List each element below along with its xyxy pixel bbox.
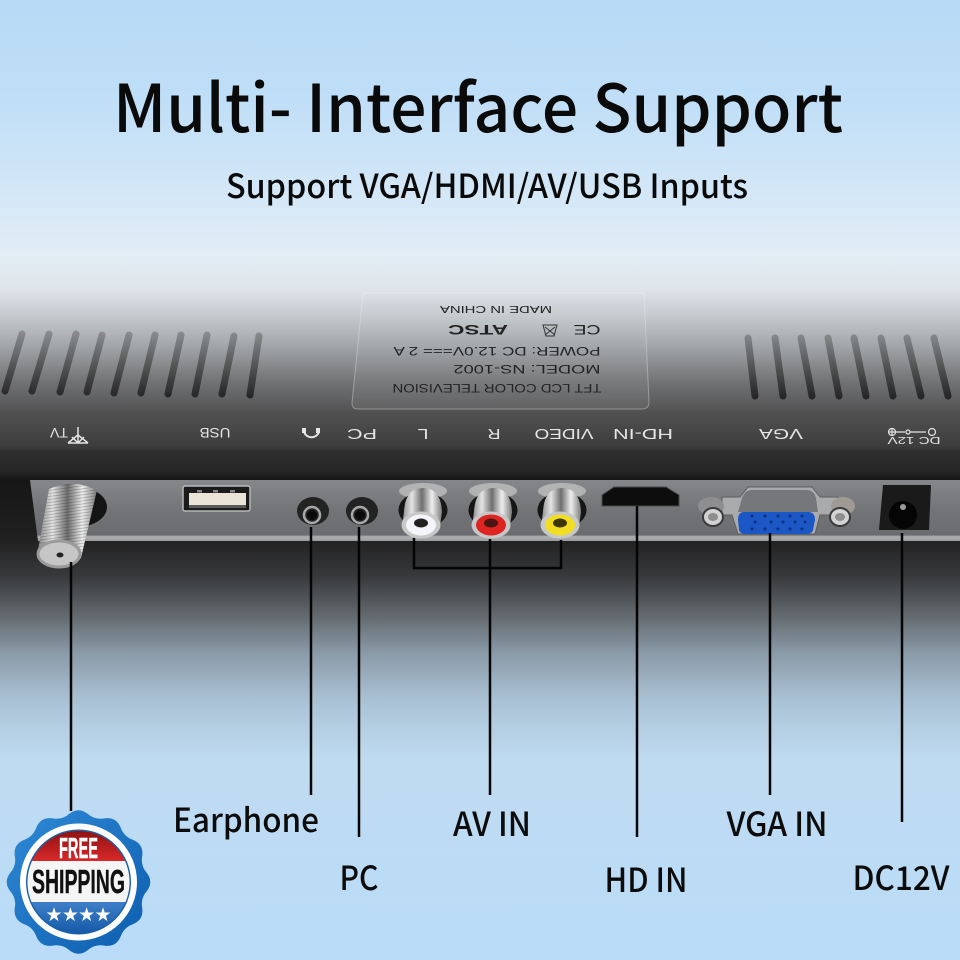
RCA yellow connector xyxy=(538,483,586,538)
plate icon: recycle bin mark xyxy=(543,325,557,336)
badge inner blue ring xyxy=(26,830,131,934)
badge text: FREE: FREE xyxy=(59,833,98,865)
VGA port xyxy=(698,487,855,534)
leader: VGA IN xyxy=(769,533,771,795)
leader lines xyxy=(71,506,902,837)
caption: DC12V: DC12V xyxy=(852,852,950,900)
plate text: CE mark: CE xyxy=(574,322,600,338)
title: Multi- Interface Support xyxy=(113,56,843,152)
RCA white connector xyxy=(398,483,448,538)
subtitle: Support VGA/HDMI/AV/USB Inputs xyxy=(226,160,748,208)
caption: HD IN: HD IN xyxy=(604,854,688,902)
TV coaxial connector xyxy=(38,484,107,567)
RCA red connector xyxy=(468,483,518,538)
leader: AV bracket xyxy=(414,538,561,568)
plate text: ATSC: ATSC xyxy=(448,322,508,338)
badge white ring xyxy=(20,824,137,940)
plate text: power: POWER: DC 12.0V=== 2 A xyxy=(394,344,600,358)
badge white band xyxy=(27,861,130,902)
silkscreen port labels xyxy=(49,425,940,446)
label: USB: USB xyxy=(200,425,230,441)
PC audio jack xyxy=(346,497,378,525)
label: L: L xyxy=(418,425,428,442)
badge text: stars: ★★★★ xyxy=(46,904,112,926)
caption: VGA IN: VGA IN xyxy=(726,798,828,846)
label: DC 12V: DC 12V xyxy=(888,434,940,446)
right vent slits xyxy=(748,338,948,396)
leader: AV IN xyxy=(489,539,491,795)
USB port xyxy=(183,486,250,511)
connector panel xyxy=(30,480,960,541)
badge scalloped edge xyxy=(7,810,150,954)
free shipping badge xyxy=(7,810,150,954)
left vent slits xyxy=(5,334,259,395)
plate text: television: TFT LCD COLOR TELEVISION xyxy=(392,381,602,395)
earphone jack xyxy=(297,497,329,525)
VGA right screw xyxy=(830,497,855,526)
label: TV: TV xyxy=(49,425,68,441)
leader: TV xyxy=(70,562,72,811)
badge text: SHIPPING: SHIPPING xyxy=(32,863,125,900)
label: VIDEO: VIDEO xyxy=(534,425,594,442)
label: R: R xyxy=(487,425,500,442)
HDMI port xyxy=(602,487,679,506)
port captions xyxy=(173,794,950,902)
VGA left screw xyxy=(698,497,724,526)
badge blue lower dome xyxy=(32,902,126,933)
badge red dome xyxy=(32,831,125,861)
icon: antenna xyxy=(68,427,88,443)
label: PC: PC xyxy=(347,425,377,442)
label: VGA: VGA xyxy=(759,425,803,442)
caption: PC: PC xyxy=(340,852,378,900)
leader: HD IN xyxy=(636,506,638,837)
leader: DC12V xyxy=(901,533,903,822)
DC power jack xyxy=(879,485,931,530)
caption: Earphone: Earphone xyxy=(173,794,319,842)
icon: DC polarity symbol xyxy=(888,428,936,436)
rating label plate xyxy=(352,293,649,409)
label: HD-IN: HD-IN xyxy=(613,425,673,442)
leader: earphone xyxy=(310,527,312,795)
icon: earphone xyxy=(302,428,320,437)
caption: AV IN: AV IN xyxy=(453,798,531,846)
plate text: made in china: MADE IN CHINA xyxy=(440,303,552,315)
leader: PC xyxy=(358,527,360,837)
plate text: model: MODEL: NS-1002 xyxy=(453,362,600,376)
